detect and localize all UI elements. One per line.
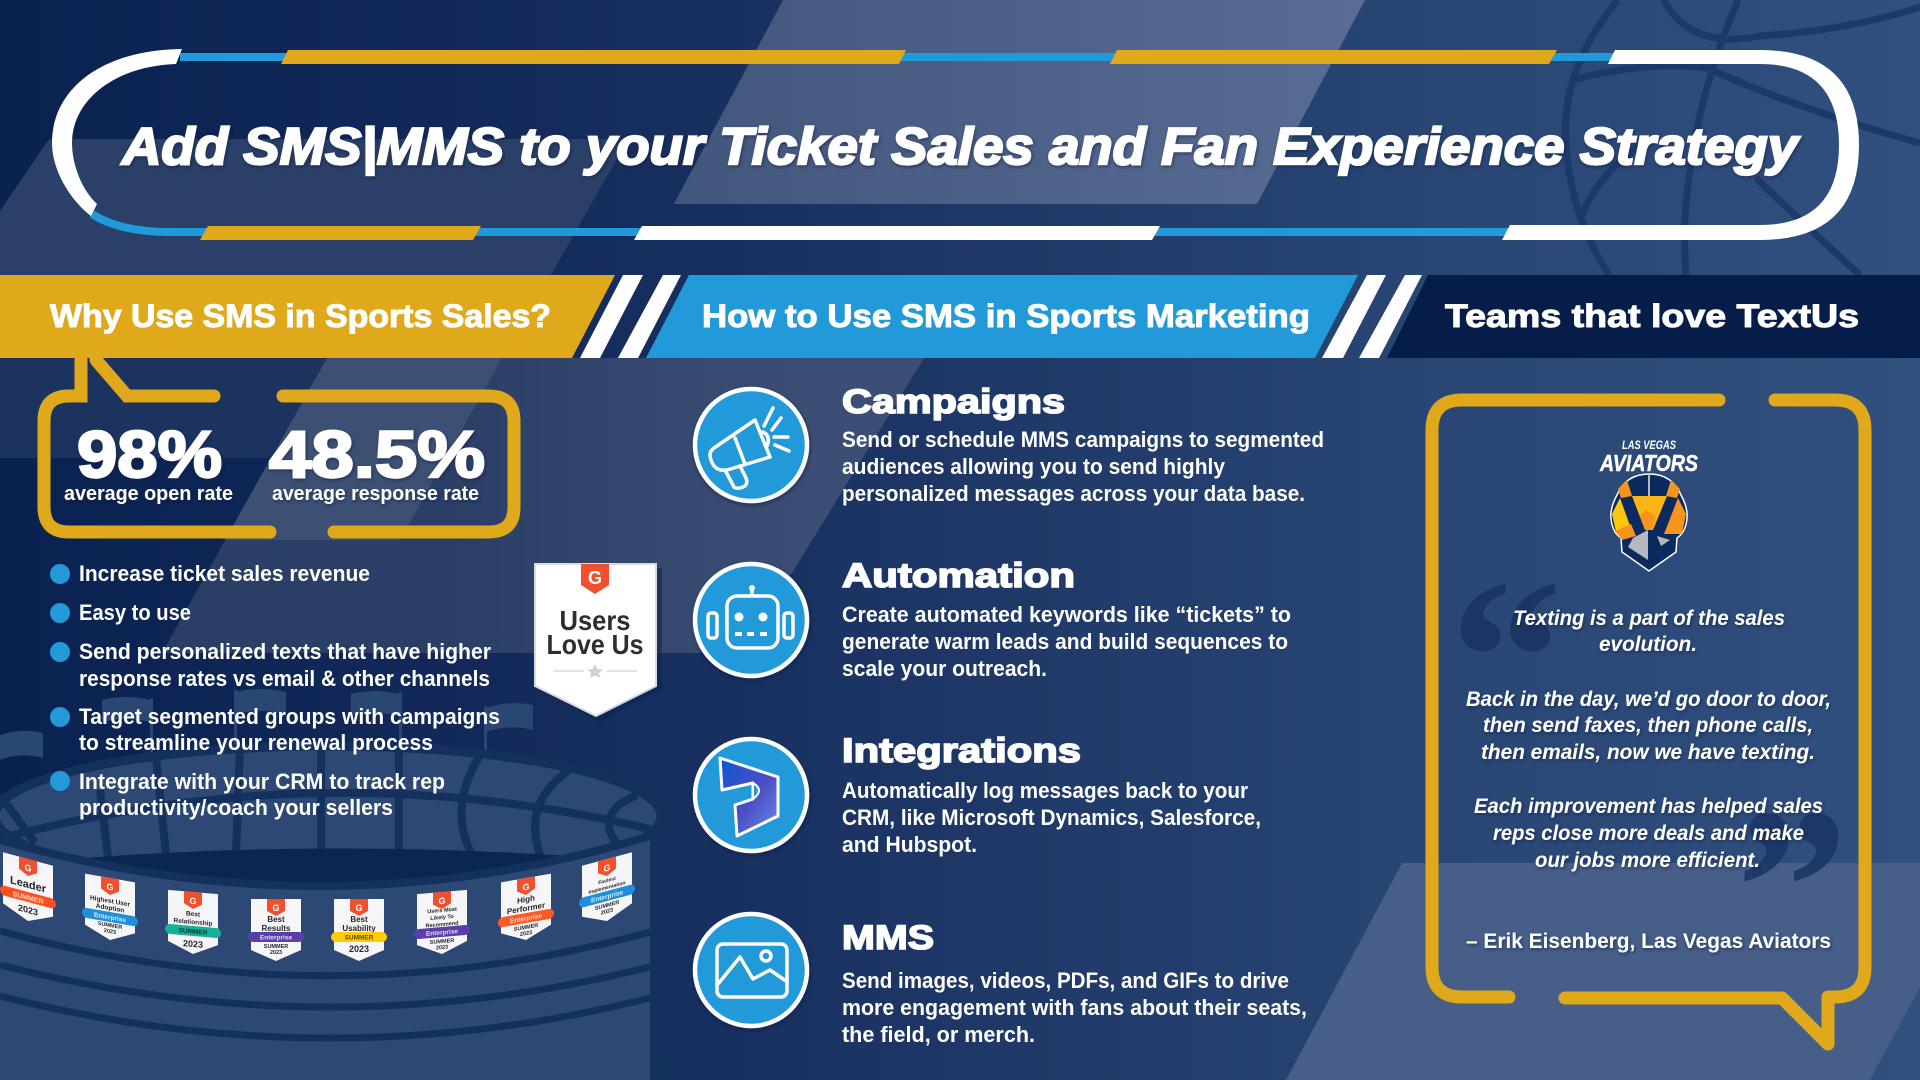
header: why use SMS: Why Use SMS in Sports Sales? xyxy=(50,298,551,334)
quote text: Each improvement has helped sales xyxy=(1474,795,1823,818)
badge: best results: 2023 xyxy=(270,950,282,956)
header: why use SMS xyxy=(0,275,615,358)
badge: best results: Best xyxy=(267,915,285,924)
feature: automation xyxy=(842,557,1291,681)
stat: open rate xyxy=(64,417,233,505)
badge: best results: SUMMER xyxy=(264,944,288,950)
badge: users most likely to recommend: G xyxy=(438,896,446,906)
feature: integrations xyxy=(842,732,1261,857)
bullet list: Integrate with your CRM to track rep xyxy=(79,769,445,794)
feature: automation: scale your outreach. xyxy=(842,656,1047,681)
badge: best relationship: Best xyxy=(186,910,201,919)
badge: users love us xyxy=(535,564,662,722)
feature: campaigns: Send or schedule MMS campaigns to segmented xyxy=(842,427,1324,452)
stat: open rate: 98% xyxy=(77,417,222,491)
badge: best results: G xyxy=(272,903,280,913)
feature: automation: Create automated keywords like “tickets” to xyxy=(842,602,1291,627)
title frame xyxy=(52,49,1859,240)
badge: best usability: G xyxy=(355,903,363,913)
logo: Las Vegas Aviators xyxy=(1599,438,1699,571)
bullet list: response rates vs email & other channels xyxy=(79,666,490,691)
badge: best usability: Usability xyxy=(342,924,376,933)
header: teams xyxy=(1387,275,1920,358)
quotation mark: close: ” xyxy=(1736,762,1848,1012)
feature: automation: generate warm leads and build sequences to xyxy=(842,629,1288,654)
feature: integrations: and Hubspot. xyxy=(842,832,977,857)
badge: leader: SUMMER xyxy=(12,890,44,906)
stadium background xyxy=(0,689,680,1080)
speech bubble outline xyxy=(1432,400,1865,1044)
stats callout xyxy=(44,360,514,532)
quote text: evolution. xyxy=(1599,633,1697,656)
icon: robot xyxy=(695,564,807,676)
badge: high performer: SUMMER xyxy=(514,923,538,933)
award badges xyxy=(0,851,635,961)
badge: fastest implementation: SUMMER xyxy=(595,900,619,912)
feature: MMS: more engagement with fans about their seats, xyxy=(842,995,1307,1020)
feature: integrations: Automatically log messages back to your xyxy=(842,778,1248,803)
quote text: Texting is a part of the sales xyxy=(1513,607,1785,630)
feature: campaigns: audiences allowing you to send highly xyxy=(842,454,1226,479)
icon: dynamics logo xyxy=(695,739,807,851)
badge: highest user adoption: Adoption xyxy=(96,903,124,914)
header divider stripes right xyxy=(1322,275,1422,358)
quote text: our jobs more efficient. xyxy=(1535,849,1760,872)
bullet list xyxy=(50,561,500,820)
quote text xyxy=(1466,607,1831,872)
badge: leader: Leader xyxy=(10,874,47,896)
feature: campaigns xyxy=(842,383,1324,506)
badge: high performer: G xyxy=(523,881,529,893)
quotation mark: open: “ xyxy=(1450,532,1562,782)
quote attribution: – Erik Eisenberg, Las Vegas Aviators xyxy=(1466,930,1831,953)
callout outline xyxy=(44,360,514,532)
badge: best results: Results xyxy=(262,924,291,933)
badge: fastest implementation: Fastest xyxy=(598,876,616,886)
header divider stripes left xyxy=(580,275,681,358)
header: teams: Teams that love TextUs xyxy=(1445,298,1859,334)
bullet list: productivity/coach your sellers xyxy=(79,795,393,820)
badge: best results: Enterprise xyxy=(260,934,292,942)
badge: leader xyxy=(0,851,56,929)
basketball background xyxy=(1565,0,1920,275)
badge: best usability xyxy=(331,899,387,961)
feature: campaigns: Campaigns xyxy=(842,383,1065,421)
stat: open rate: average open rate xyxy=(64,483,233,505)
feature: integrations: Integrations xyxy=(842,732,1081,770)
bullet list: Send personalized texts that have higher xyxy=(79,639,491,664)
badge: fastest implementation: Enterprise xyxy=(591,889,623,905)
badge: users most likely to recommend: 2023 xyxy=(436,944,448,952)
badge: users most likely to recommend: Recommend xyxy=(426,921,458,929)
quote text: then emails, now we have texting. xyxy=(1481,741,1815,764)
badge: best relationship xyxy=(165,890,221,956)
title: Add SMS|MMS to your Ticket Sales and Fan Experience Strategy xyxy=(120,118,1801,176)
badge: users most likely to recommend: Likely To xyxy=(430,914,454,922)
badge: highest user adoption: G xyxy=(107,881,113,893)
bullet list: Easy to use xyxy=(79,600,191,625)
quote text: then send faxes, then phone calls, xyxy=(1483,714,1813,737)
feature: integrations: CRM, like Microsoft Dynamics, Salesforce, xyxy=(842,805,1261,830)
badge: high performer: Enterprise xyxy=(510,913,542,925)
badge: fastest implementation: G xyxy=(603,862,611,874)
badge: users love us: G xyxy=(588,568,602,588)
bullet list: Increase ticket sales revenue xyxy=(79,561,370,586)
icon: megaphone xyxy=(695,389,807,501)
badge: highest user adoption: Highest User xyxy=(90,895,130,909)
badge: best relationship: 2023 xyxy=(183,938,203,950)
logo: Las Vegas Aviators: LAS VEGAS xyxy=(1622,438,1676,452)
icon: image xyxy=(695,914,807,1026)
badge: high performer: Performer xyxy=(507,901,546,916)
feature: MMS: the field, or merch. xyxy=(842,1022,1035,1047)
quote text: Back in the day, we’d go door to door, xyxy=(1466,688,1831,711)
badge: users most likely to recommend: Users Most xyxy=(427,907,457,915)
header: how to use SMS xyxy=(646,275,1358,358)
badge: highest user adoption: 2023 xyxy=(104,928,116,936)
badge: best results xyxy=(248,899,304,961)
badge: best relationship: SUMMER xyxy=(179,927,208,937)
badge: users most likely to recommend xyxy=(414,890,470,956)
badge: users love us: Love Us xyxy=(546,629,644,660)
badge: high performer xyxy=(498,873,554,945)
badge: fastest implementation: Implementation xyxy=(589,880,625,896)
badge: high performer: 2023 xyxy=(520,930,532,938)
badge: fastest implementation: 2023 xyxy=(601,907,613,917)
badge: fastest implementation xyxy=(579,851,635,929)
badge: highest user adoption: Enterprise xyxy=(94,912,126,924)
badge: best usability: 2023 xyxy=(349,944,369,954)
badge: leader: G xyxy=(24,862,32,874)
badge: users love us: Users xyxy=(560,605,630,636)
feature: automation: Automation xyxy=(842,557,1075,595)
feature: MMS: Send images, videos, PDFs, and GIFs to drive xyxy=(842,968,1289,993)
feature: MMS: MMS xyxy=(842,919,934,957)
badge: users most likely to recommend: SUMMER xyxy=(430,938,454,946)
badge: users most likely to recommend: Enterprise xyxy=(426,928,458,938)
bullet list: to streamline your renewal process xyxy=(79,730,433,755)
badge: leader: 2023 xyxy=(18,902,38,918)
badge: best relationship: G xyxy=(189,896,197,906)
bullet list: Target segmented groups with campaigns xyxy=(79,704,500,729)
badge: highest user adoption xyxy=(82,873,138,945)
badge: high performer: High xyxy=(517,893,535,906)
feature: MMS xyxy=(842,919,1307,1047)
logo: Las Vegas Aviators: AVIATORS xyxy=(1599,450,1699,476)
badge: best usability: SUMMER xyxy=(345,934,374,942)
header: how to use SMS: How to Use SMS in Sports Marketing xyxy=(702,298,1310,334)
testimonial panel xyxy=(1432,400,1865,1044)
badge: best usability: Best xyxy=(350,915,368,924)
feature: campaigns: personalized messages across your data base. xyxy=(842,481,1305,506)
stat: response rate: average response rate xyxy=(272,483,479,505)
badge: best relationship: Relationship xyxy=(174,917,212,928)
stat: response rate: 48.5% xyxy=(269,417,485,491)
quote text: reps close more deals and make xyxy=(1493,822,1804,845)
badge: highest user adoption: SUMMER xyxy=(98,921,122,931)
